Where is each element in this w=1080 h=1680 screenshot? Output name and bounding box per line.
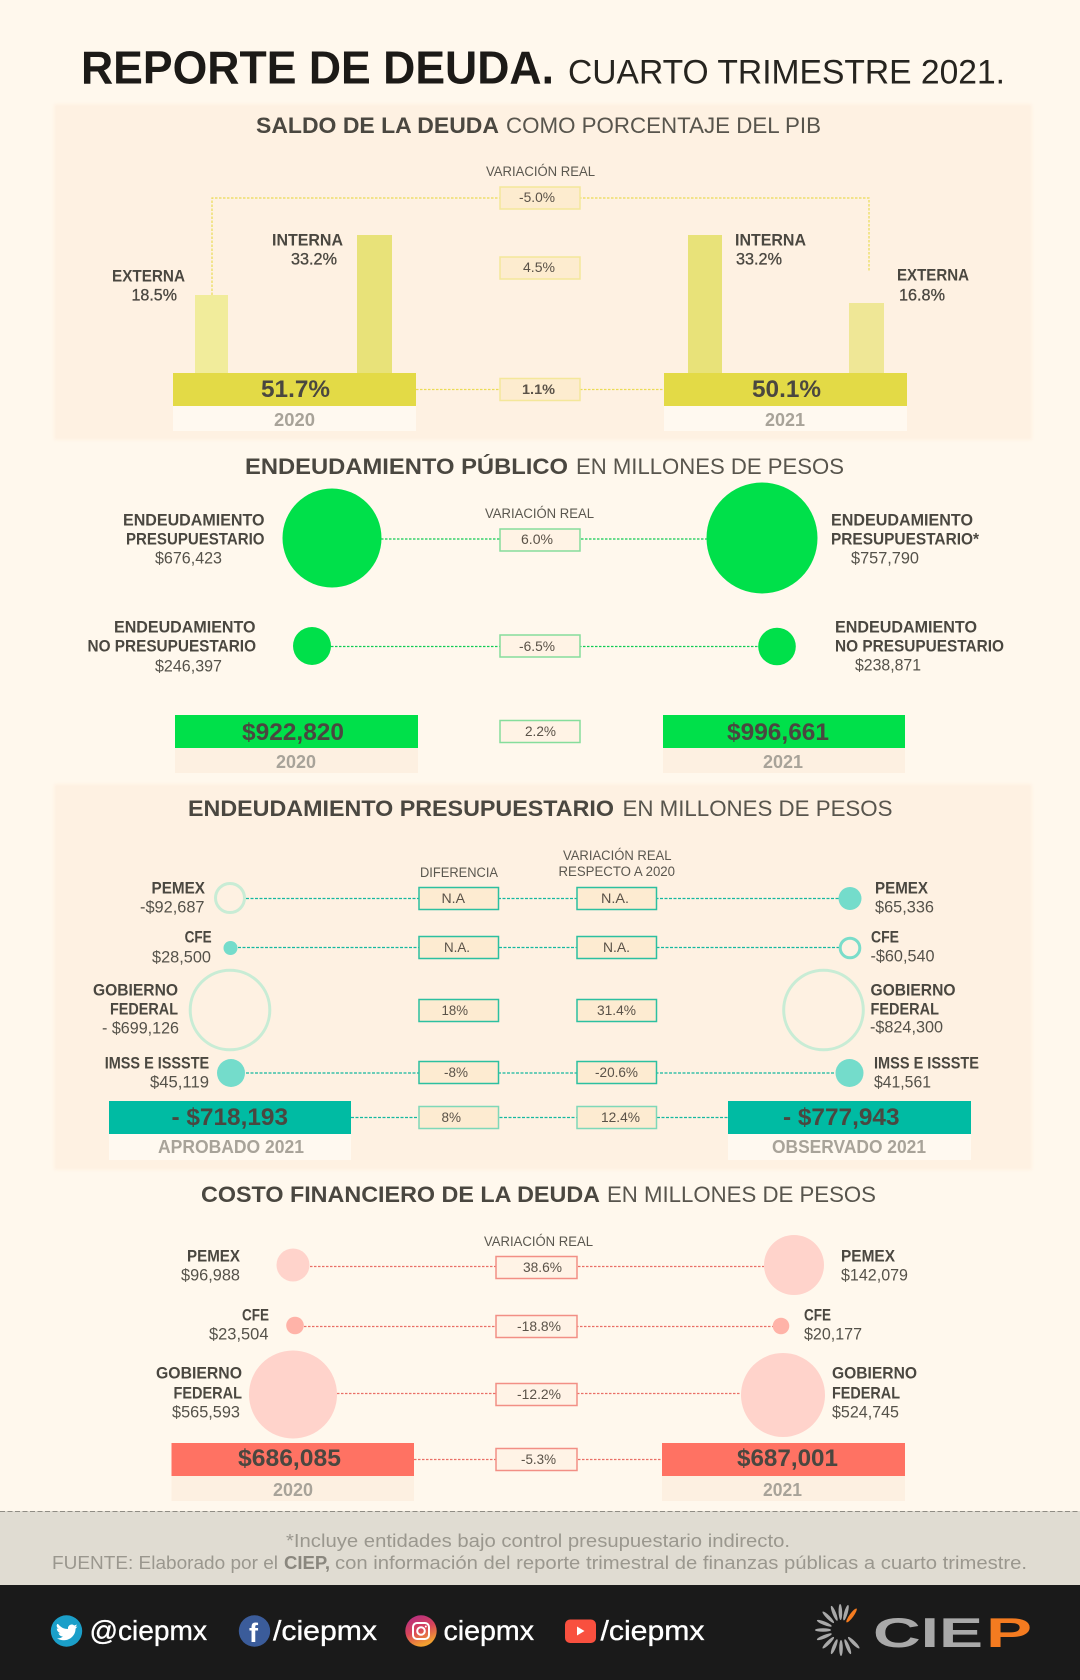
label: gobierno federal aprobado: FEDERAL <box>110 1000 178 1018</box>
observado 2021: OBSERVADO 2021 <box>772 1137 926 1157</box>
source text <box>52 1552 1027 1573</box>
label: imss observado <box>874 1054 979 1091</box>
label: interna 2020 <box>272 231 343 268</box>
logo: CIEP <box>815 1604 1032 1656</box>
label: gobierno federal 2021: FEDERAL <box>832 1384 900 1402</box>
label: externa 2020: 18.5% <box>132 286 177 304</box>
variation: total <box>500 720 580 742</box>
bubble: pemex 2020 <box>276 1248 310 1282</box>
bubble: gobierno federal 2020 <box>249 1350 337 1438</box>
label: no presupuestario 2021 <box>835 618 1004 674</box>
label: presupuestario 2021: PRESUPUESTARIO* <box>831 530 980 548</box>
label: cfe 2021: CFE <box>804 1306 831 1324</box>
label: variación real respecto a 2020: RESPECTO A 2020 <box>558 864 675 879</box>
label: presupuestario 2020: ENDEUDAMIENTO <box>123 511 265 529</box>
variación: imss <box>577 1062 656 1084</box>
label: variación real: VARIACIÓN REAL <box>485 506 594 521</box>
year 2021 <box>663 748 905 773</box>
total 2021 <box>663 715 905 748</box>
variation: total <box>500 378 580 400</box>
label: gobierno federal observado: -$824,300 <box>870 1018 943 1036</box>
label: presupuestario 2021 <box>831 511 980 567</box>
label: cfe aprobado <box>152 928 212 966</box>
variation: total deuda: -5.0% <box>519 189 555 205</box>
label: cfe observado: CFE <box>871 928 899 946</box>
aprobado 2021 <box>109 1134 351 1160</box>
label: no presupuestario 2020: ENDEUDAMIENTO <box>114 618 256 636</box>
icon: instagram <box>405 1615 437 1647</box>
label: cfe 2020 <box>209 1306 269 1343</box>
variación: total: 12.4% <box>601 1109 640 1125</box>
heading: costo financiero: COSTO FINANCIERO DE LA DEUDA <box>201 1182 600 1207</box>
label: no presupuestario 2020 <box>88 618 256 675</box>
label: interna 2021: 33.2% <box>736 250 782 268</box>
source text: FUENTE: Elaborado por el <box>52 1552 278 1573</box>
label: cfe aprobado: CFE <box>185 928 212 946</box>
diferencia: total <box>419 1106 498 1128</box>
label: gobierno federal 2020 <box>156 1364 242 1421</box>
heading: endeudamiento presupuestario: ENDEUDAMIENTO PRESUPUESTARIO <box>188 796 614 821</box>
total 2020 <box>173 373 416 406</box>
label: no presupuestario 2021: NO PRESUPUESTARIO <box>835 637 1004 655</box>
label: variación real respecto a 2020 <box>558 848 675 879</box>
variation: total <box>496 1448 577 1470</box>
bubble: cfe observado <box>840 938 860 958</box>
variation: gobierno federal: -12.2% <box>517 1386 561 1402</box>
bubble: cfe 2021 <box>773 1318 789 1334</box>
total 2020: 51.7% <box>261 376 330 403</box>
label: externa 2020: EXTERNA <box>112 267 185 285</box>
title: REPORTE DE DEUDA. <box>81 42 554 94</box>
label: imss aprobado: $45,119 <box>150 1073 209 1091</box>
source text: CIEP, <box>284 1552 330 1573</box>
label: gobierno federal observado: FEDERAL <box>870 1000 939 1018</box>
variation: gobierno federal <box>496 1384 577 1406</box>
label: gobierno federal 2021 <box>832 1364 917 1421</box>
label: pemex observado: PEMEX <box>875 879 928 897</box>
total observado: - $777,943 <box>783 1104 900 1131</box>
year 2020 <box>172 1476 414 1501</box>
diferencia: cfe: N.A. <box>444 939 470 955</box>
label: interna 2020: INTERNA <box>272 231 343 249</box>
diferencia: total: 8% <box>442 1109 461 1125</box>
bubble: gobierno federal 2021 <box>741 1353 825 1437</box>
label: pemex 2021: PEMEX <box>841 1247 895 1265</box>
icon: facebook: f <box>249 1618 259 1648</box>
label: imss observado: IMSS E ISSSTE <box>874 1054 979 1072</box>
label: presupuestario 2021: $757,790 <box>851 549 919 567</box>
label: pemex 2021 <box>841 1247 908 1284</box>
label: externa 2021: EXTERNA <box>897 266 969 284</box>
label: cfe observado: -$60,540 <box>870 947 934 965</box>
year 2020: 2020 <box>273 1480 313 1500</box>
variación: gobierno federal <box>577 1000 656 1022</box>
heading: saldo de la deuda: SALDO DE LA DEUDA <box>256 113 499 138</box>
year 2021: 2021 <box>763 1480 802 1500</box>
bubble: cfe aprobado <box>224 941 238 955</box>
footnote text: *Incluye entidades bajo control presupuestario indirecto. <box>286 1530 790 1551</box>
heading: saldo de la deuda: COMO PORCENTAJE DEL PIB <box>506 113 821 138</box>
handle: twitter: @ciepmx <box>90 1615 207 1646</box>
bubble: gobierno federal observado <box>784 970 863 1050</box>
variation: no presupuestario <box>500 635 580 657</box>
label: pemex 2021: $142,079 <box>841 1266 908 1284</box>
total 2021: $687,001 <box>737 1445 838 1472</box>
label: imss aprobado: IMSS E ISSSTE <box>105 1054 209 1072</box>
label: pemex observado <box>875 879 934 916</box>
observado 2021 <box>728 1134 971 1160</box>
variación: gobierno federal: 31.4% <box>597 1002 636 1018</box>
bubble: presupuestario 2020 <box>282 488 382 588</box>
label: externa 2021: 16.8% <box>899 286 945 304</box>
label: no presupuestario 2021: $238,871 <box>855 656 921 674</box>
total 2021 <box>662 1443 905 1476</box>
variation: pemex: 38.6% <box>523 1259 562 1275</box>
diferencia: imss <box>419 1062 498 1084</box>
bubble: pemex observado <box>838 887 862 910</box>
label: pemex observado: $65,336 <box>875 898 934 916</box>
total 2020 <box>175 715 418 748</box>
label: presupuestario 2021: ENDEUDAMIENTO <box>831 511 973 529</box>
bubble: no presupuestario 2021 <box>758 628 796 665</box>
variation: cfe: -18.8% <box>517 1318 561 1334</box>
bubble: imss observado <box>836 1059 864 1087</box>
heading: costo financiero <box>201 1182 876 1207</box>
variación: pemex <box>577 888 656 910</box>
bar: externa 2021 <box>849 303 884 373</box>
label: gobierno federal 2020: $565,593 <box>172 1403 240 1421</box>
total 2020: $922,820 <box>242 719 344 746</box>
handle: instagram: ciepmx <box>444 1615 534 1646</box>
logo burst <box>815 1604 861 1656</box>
footer bar <box>0 1585 1080 1680</box>
label: diferencia: DIFERENCIA <box>420 865 498 880</box>
panel: endeudamiento público <box>88 454 1004 773</box>
total 2021: $996,661 <box>727 719 829 746</box>
bubble: pemex aprobado <box>216 884 244 912</box>
year 2020 <box>173 406 416 431</box>
total aprobado <box>109 1101 351 1134</box>
year 2020: 2020 <box>274 410 315 430</box>
variation: presupuestario: 6.0% <box>521 531 553 547</box>
diferencia: gobierno federal <box>419 1000 498 1022</box>
bar: externa 2020 <box>195 295 228 373</box>
label: cfe 2021 <box>804 1306 862 1343</box>
bubble: presupuestario 2021 <box>706 482 818 594</box>
heading: endeudamiento público: EN MILLONES DE PESOS <box>576 454 844 479</box>
label: interna 2021: INTERNA <box>735 231 806 249</box>
label: presupuestario 2020: PRESUPUESTARIO <box>126 530 265 548</box>
label: pemex 2020 <box>181 1247 240 1284</box>
label: cfe 2020: $23,504 <box>209 1325 268 1343</box>
footnote band <box>0 1511 1080 1585</box>
year 2021: 2021 <box>765 410 805 430</box>
label: variación real: VARIACIÓN REAL <box>484 1234 593 1249</box>
label: cfe aprobado: $28,500 <box>152 948 211 966</box>
label: gobierno federal observado: GOBIERNO <box>870 981 956 999</box>
aprobado 2021: APROBADO 2021 <box>158 1137 304 1157</box>
label: variación real: VARIACIÓN REAL <box>486 164 595 179</box>
diferencia: cfe <box>419 936 498 958</box>
year 2020: 2020 <box>276 752 316 772</box>
logo: CIEP: P <box>986 1609 1032 1656</box>
variación: cfe <box>577 936 656 958</box>
total 2021: 50.1% <box>752 376 821 403</box>
total 2020 <box>172 1443 414 1476</box>
label: no presupuestario 2020: NO PRESUPUESTARIO <box>88 637 256 655</box>
label: gobierno federal aprobado: - $699,126 <box>102 1019 179 1037</box>
label: cfe observado <box>870 928 934 965</box>
label: cfe 2020: CFE <box>242 1306 269 1324</box>
heading: costo financiero: EN MILLONES DE PESOS <box>607 1182 876 1207</box>
variación: imss: -20.6% <box>595 1064 638 1080</box>
variation: no presupuestario: -6.5% <box>519 638 555 654</box>
diferencia: pemex: N.A <box>442 890 466 906</box>
bar: interna 2021 <box>688 235 722 373</box>
icon: youtube <box>565 1620 596 1643</box>
total 2021 <box>664 373 907 406</box>
variation: cfe <box>496 1316 577 1338</box>
logo: CIEP: CIE <box>873 1609 983 1656</box>
heading: saldo de la deuda <box>256 113 821 138</box>
variation: presupuestario <box>500 529 580 551</box>
variation: interna: 4.5% <box>523 259 555 275</box>
variación: cfe: N.A. <box>603 939 630 955</box>
label: gobierno federal observado <box>870 981 956 1036</box>
label: pemex aprobado: -$92,687 <box>140 898 204 916</box>
diferencia: gobierno federal: 18% <box>442 1002 468 1018</box>
diferencia: pemex <box>419 888 498 910</box>
panel: costo financiero <box>156 1182 917 1501</box>
label: variación real respecto a 2020: VARIACIÓN REAL <box>563 848 672 863</box>
label: gobierno federal 2021: GOBIERNO <box>832 1364 917 1382</box>
variation: pemex <box>496 1256 577 1278</box>
label: gobierno federal aprobado: GOBIERNO <box>93 981 178 999</box>
bar: interna 2020 <box>357 235 392 373</box>
label: imss observado: $41,561 <box>874 1073 931 1091</box>
heading: endeudamiento público: ENDEUDAMIENTO PÚBLICO <box>245 454 568 479</box>
label: externa 2021 <box>897 266 969 304</box>
label: no presupuestario 2021: ENDEUDAMIENTO <box>835 618 977 636</box>
variation: interna <box>500 257 580 279</box>
bubble: gobierno federal aprobado <box>190 970 270 1050</box>
variación: total <box>577 1106 656 1128</box>
heading: endeudamiento presupuestario <box>188 796 892 821</box>
label: pemex 2020: PEMEX <box>187 1247 240 1265</box>
bubble: pemex 2021 <box>764 1235 824 1295</box>
total aprobado: - $718,193 <box>172 1104 288 1131</box>
bubble: cfe 2020 <box>286 1317 304 1334</box>
label: pemex aprobado <box>140 879 205 916</box>
icon: facebook <box>239 1615 270 1648</box>
label: imss aprobado <box>105 1054 209 1091</box>
variation: total: 2.2% <box>525 723 556 739</box>
label: presupuestario 2020 <box>123 511 265 567</box>
label: cfe 2021: $20,177 <box>804 1325 862 1343</box>
variation: total: -5.3% <box>521 1451 556 1467</box>
label: pemex aprobado: PEMEX <box>152 879 205 897</box>
diferencia: imss: -8% <box>444 1064 468 1080</box>
handle: youtube: /ciepmx <box>600 1615 704 1646</box>
label: gobierno federal 2020: GOBIERNO <box>156 1364 242 1382</box>
label: gobierno federal 2021: $524,745 <box>832 1403 899 1421</box>
source text: con información del reporte trimestral de finanzas públicas a cuarto trimestre. <box>335 1552 1027 1573</box>
label: interna 2020: 33.2% <box>291 250 337 268</box>
label: presupuestario 2020: $676,423 <box>155 549 222 567</box>
handle: facebook: /ciepmx <box>273 1615 377 1646</box>
variación: pemex: N.A. <box>601 890 629 906</box>
icon: twitter <box>51 1615 82 1647</box>
heading: endeudamiento público <box>245 454 844 479</box>
title <box>81 42 1005 94</box>
year 2021 <box>664 406 907 431</box>
panel: endeudamiento presupuestario <box>54 784 1032 1170</box>
heading: endeudamiento presupuestario: EN MILLONES DE PESOS <box>622 796 892 821</box>
variation: total deuda <box>500 187 580 209</box>
label: interna 2021 <box>735 231 806 268</box>
variation: total: 1.1% <box>522 381 556 397</box>
bubble: imss aprobado <box>217 1059 245 1087</box>
label: gobierno federal aprobado <box>93 981 179 1037</box>
label: externa 2020 <box>112 267 185 304</box>
label: pemex 2020: $96,988 <box>181 1266 240 1284</box>
title: CUARTO TRIMESTRE 2021. <box>568 54 1005 92</box>
year 2020 <box>175 748 418 773</box>
label: no presupuestario 2020: $246,397 <box>155 657 222 675</box>
panel: saldo de la deuda <box>54 104 1032 440</box>
total observado <box>728 1101 971 1134</box>
bubble: no presupuestario 2020 <box>293 627 331 665</box>
year 2021: 2021 <box>763 752 803 772</box>
year 2021 <box>662 1476 905 1501</box>
total 2020: $686,085 <box>238 1445 341 1472</box>
label: gobierno federal 2020: FEDERAL <box>174 1384 242 1402</box>
